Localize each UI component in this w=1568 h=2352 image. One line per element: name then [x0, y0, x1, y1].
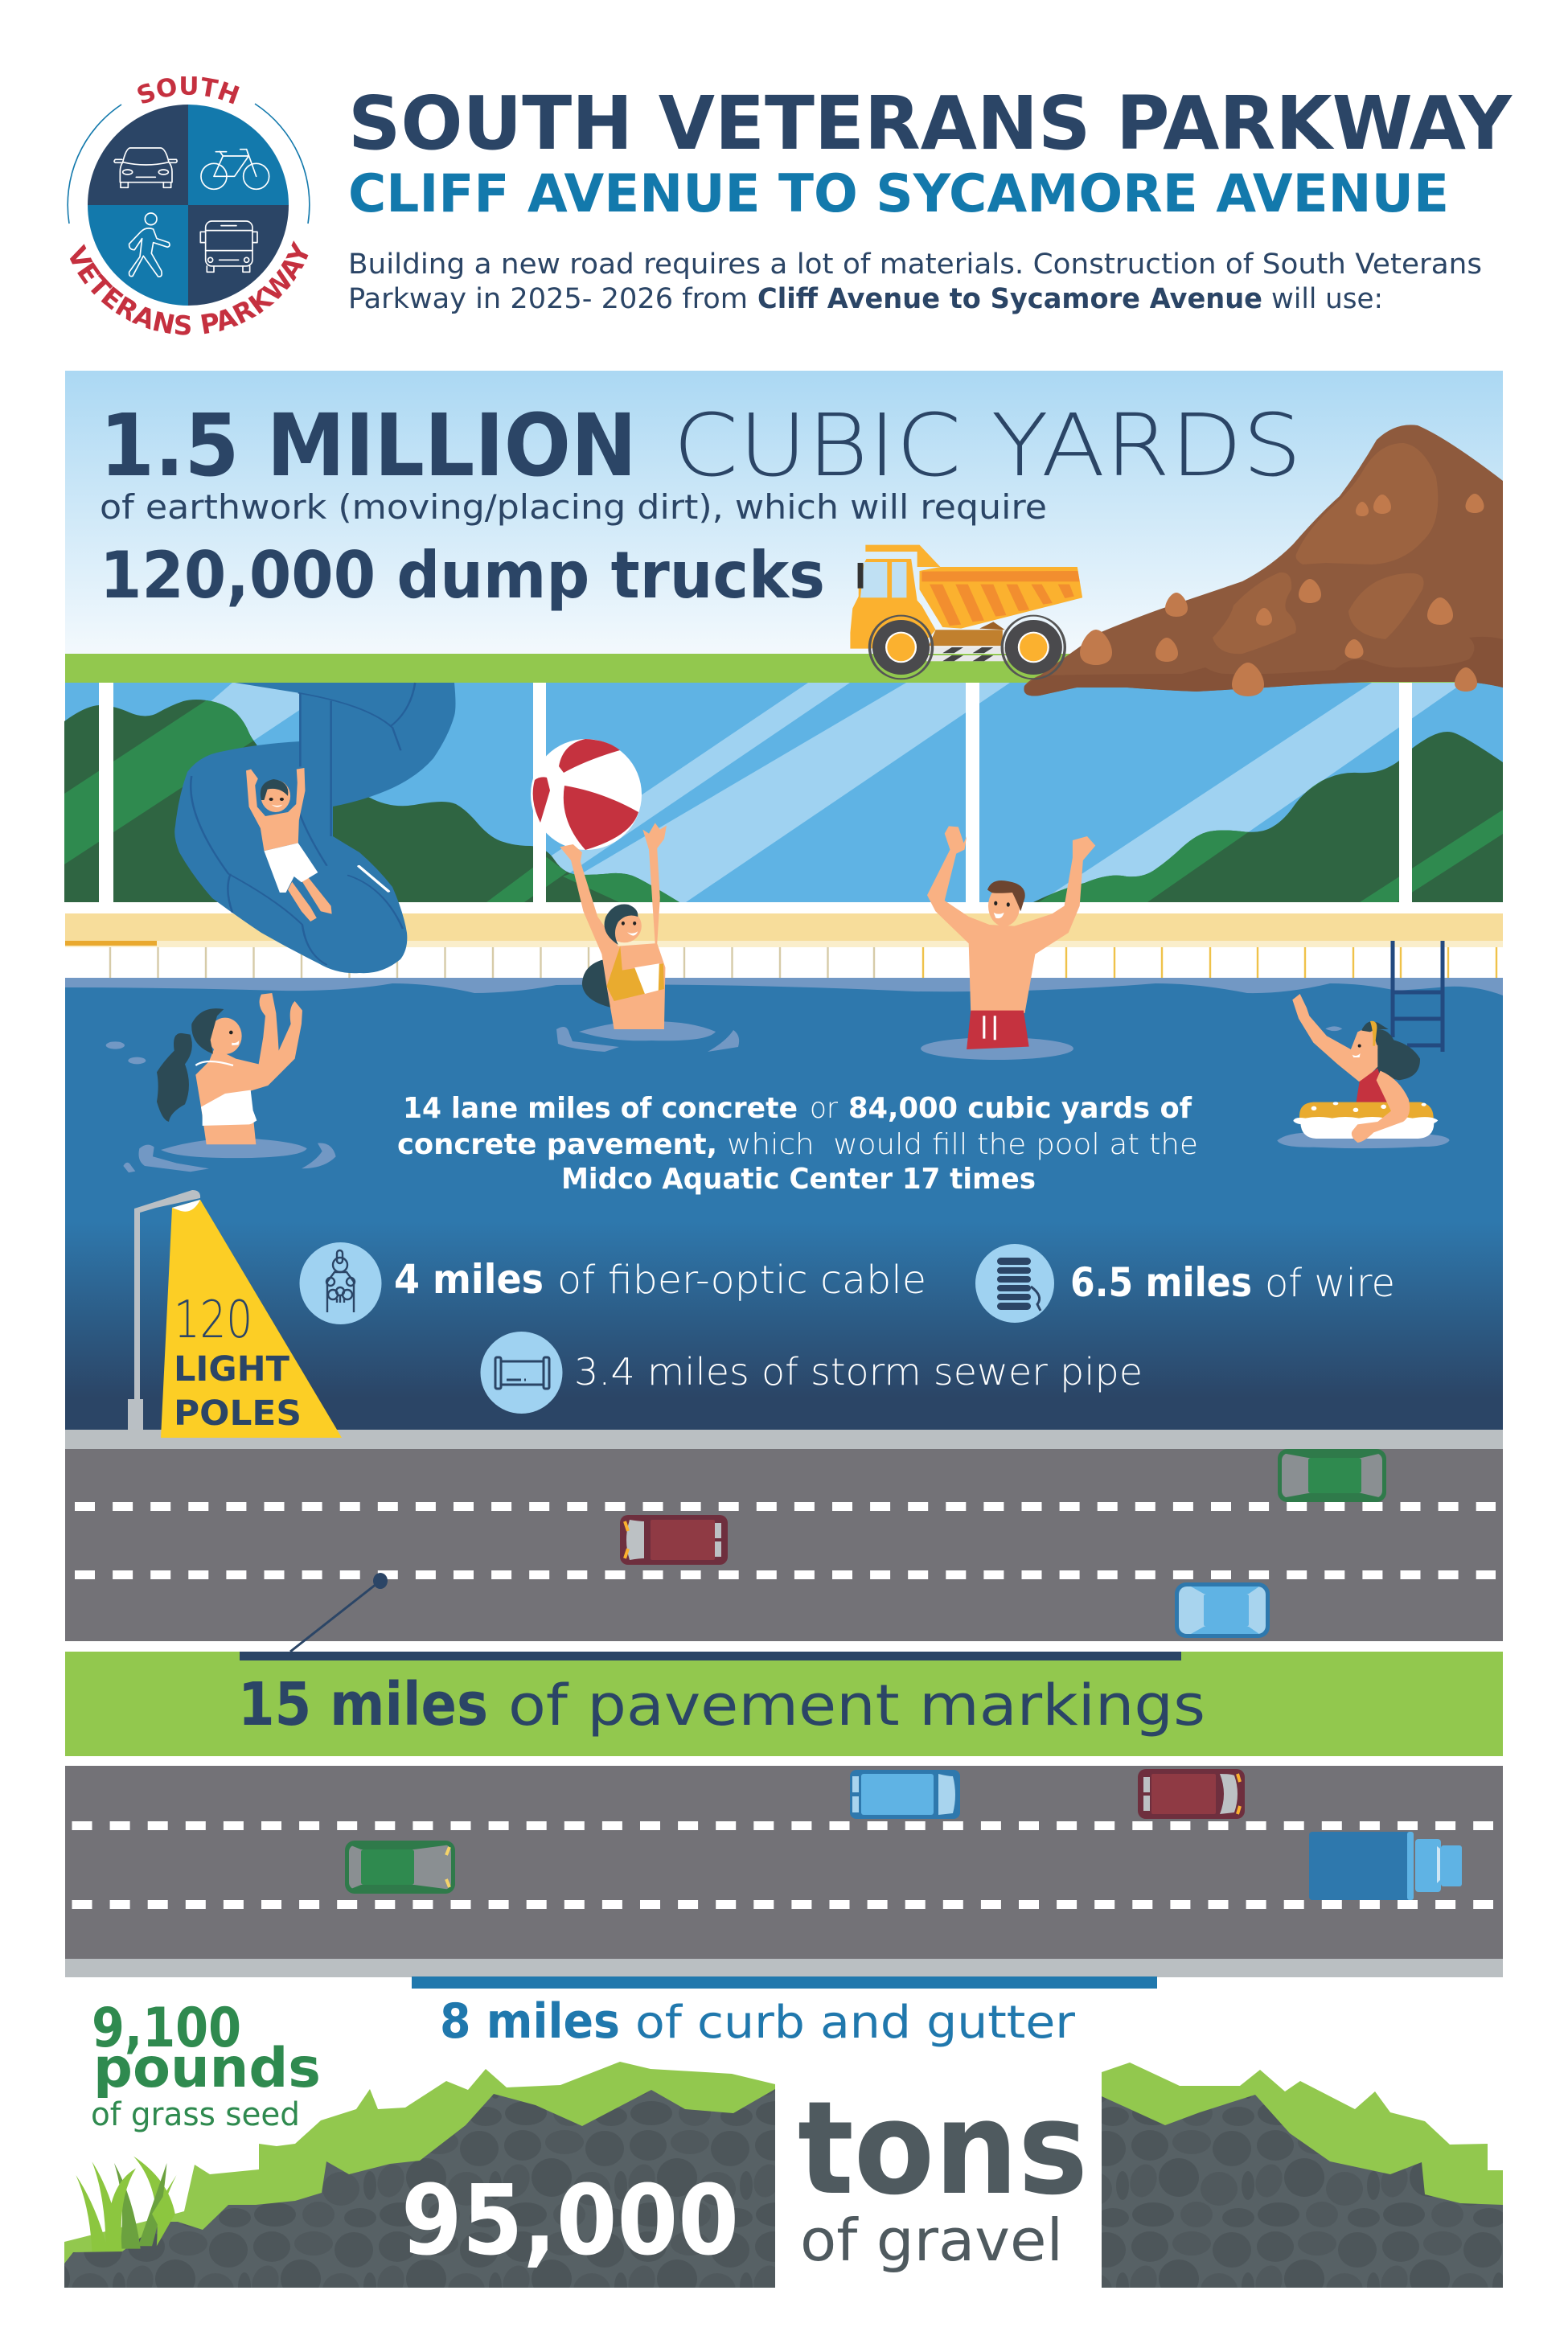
truck dump bed [865, 545, 1082, 630]
van: blue [850, 1770, 960, 1819]
intro paragraph: will use: [1271, 283, 1383, 315]
title: SOUTH VETERANS PARKWAY [348, 80, 1513, 166]
window sky [65, 683, 1503, 902]
stat: 95,000: 95,000 [401, 2165, 739, 2277]
ripple: man [921, 1037, 1073, 1060]
terrain right: grass layer [1102, 2063, 1503, 2288]
icon: fiber-optic cable [299, 1242, 381, 1324]
stat: tons: tons [798, 2073, 1088, 2223]
dirt mound with rocks [1024, 425, 1503, 696]
intro paragraph: Building a new road requires a lot of materials. Construction of South Veterans [348, 248, 1482, 281]
water surface wave [65, 978, 1503, 995]
street light with beam [128, 1190, 342, 1438]
logo text: SOUTH: SOUTH [138, 76, 240, 105]
lamp lens [172, 1200, 200, 1212]
panel: pool water [65, 978, 1503, 1430]
car: light blue [1175, 1582, 1270, 1638]
intro paragraph: Parkway in 2025- 2026 from [348, 283, 748, 315]
pool deck [65, 913, 1503, 941]
text: grass seed: 9,100 [92, 1997, 241, 2060]
truck chassis [929, 630, 1003, 646]
person: man in red shorts [921, 826, 1095, 1060]
car: red [620, 1515, 728, 1565]
man figure [927, 826, 1095, 1049]
panel: median [65, 1652, 1503, 1756]
lane dashes [75, 1507, 1496, 1574]
text: grass seed [91, 1997, 321, 2133]
truck cab [850, 559, 936, 649]
dump truck [850, 545, 1082, 679]
text: grass seed: of grass seed [91, 2096, 300, 2133]
text: 120 light poles: POLES [174, 1394, 302, 1434]
panel: road upper [65, 1449, 1503, 1641]
water slide [174, 683, 455, 973]
text: 15 miles of pavement markings: 15 miles [238, 1670, 488, 1739]
concrete callout: 84,000 cubic yards of [848, 1092, 1192, 1125]
text: fiber-optic cable: of fiber-optic cable [557, 1258, 926, 1303]
slide seam lines [191, 683, 415, 965]
terrain left: grass layer [64, 2062, 775, 2288]
light pole [128, 1190, 200, 1430]
logo outer arcs [68, 104, 310, 224]
marking bar [240, 1652, 1181, 1660]
mound light patches [1213, 443, 1438, 654]
road curb top [65, 1430, 1503, 1449]
text: grass seed: pounds [93, 2037, 321, 2100]
text: fiber-optic cable: 4 miles [394, 1256, 544, 1303]
truck chassis bars [926, 647, 1008, 661]
pavement marking pointer [290, 1573, 388, 1652]
ripple: woman with ball [556, 1021, 739, 1052]
text: 8 miles of curb and gutter [440, 1993, 1076, 2050]
truck cab windows [860, 562, 906, 597]
text: 120 light poles [174, 1291, 302, 1434]
person: woman with ponytail [106, 993, 336, 1172]
intro paragraph: Cliff Avenue to Sycamore Avenue [757, 283, 1262, 315]
hill light bands [64, 683, 1503, 902]
logo: South Veterans Parkway roundel [67, 76, 310, 335]
concrete callout: which would fill the pool at the [727, 1128, 1198, 1161]
window light bands [185, 683, 1463, 902]
text: 8 miles of curb and gutter: 8 miles [440, 1993, 620, 2050]
logo icons: car, bicycle, pedestrian, bus [114, 148, 269, 277]
text: wire [1070, 1259, 1395, 1306]
text: 120 light poles: 120 [174, 1291, 252, 1350]
text: of gravel: of gravel [800, 2206, 1063, 2274]
window pillars [99, 683, 1412, 902]
light beam [161, 1200, 342, 1438]
person: woman in float ring [1277, 994, 1450, 1148]
person: boy on slide [246, 768, 332, 922]
grass strip [65, 654, 1503, 683]
text: storm sewer pipe: 3.4 miles of storm sewer pipe [574, 1350, 1143, 1394]
truck wheels [870, 616, 1065, 679]
truck: blue, top view [1309, 1832, 1462, 1900]
rocks [1080, 494, 1484, 696]
text: 15 miles of pavement markings: of pavement markings [508, 1673, 1205, 1738]
stat: dump trucks: 120,000 dump trucks [100, 538, 825, 613]
icon: storm sewer pipe [481, 1332, 563, 1414]
panel: earthwork sky [65, 371, 1503, 654]
text: 8 miles of curb and gutter: of curb and gutter [635, 1997, 1076, 2049]
car: red [1138, 1769, 1245, 1819]
concrete callout: 14 lane miles of concrete [403, 1092, 798, 1125]
text: fiber-optic cable [394, 1256, 926, 1303]
pool ladder [1393, 941, 1443, 1052]
grass tuft [76, 2157, 176, 2251]
text: 15 miles of pavement markings [238, 1670, 1205, 1739]
earthwork description: of earthwork (moving/placing dirt), which will require [100, 487, 1047, 527]
window ledge [65, 902, 1503, 913]
intro paragraph [348, 248, 1482, 315]
lane dashes [72, 1825, 1493, 1904]
logo text: VETERANS PARKWAY: VETERANS PARKWAY [69, 240, 309, 335]
heading: 1.5 million: 1.5 MILLION [100, 396, 637, 496]
concrete callout [397, 1092, 1198, 1196]
terrain left: gravel layer [64, 2089, 775, 2288]
car: green [1278, 1449, 1386, 1502]
deck edge [65, 941, 1503, 947]
concrete callout: Midco Aquatic Center 17 times [561, 1163, 1036, 1196]
panel: pool window scene [64, 683, 1503, 978]
hills [64, 700, 1503, 902]
concrete callout: concrete pavement, [397, 1128, 717, 1161]
deck accent [65, 941, 157, 946]
curb and gutter bar [412, 1976, 1157, 1989]
panel: road lower [65, 1766, 1503, 1959]
pool tiles [65, 947, 1503, 978]
text: 120 light poles: LIGHT [174, 1349, 290, 1389]
subtitle: CLIFF AVENUE TO SYCAMORE AVENUE [348, 164, 1449, 224]
logo quadrant disc [88, 105, 289, 306]
car: green [345, 1841, 455, 1894]
concrete callout: or [810, 1092, 838, 1125]
text: wire: of wire [1265, 1261, 1395, 1306]
beach ball [531, 739, 642, 850]
road curb bottom [65, 1959, 1503, 1977]
mound dark base [1024, 637, 1503, 696]
truck mirror [858, 563, 863, 589]
text: wire: 6.5 miles [1070, 1259, 1252, 1306]
person: woman with ball [560, 823, 667, 1029]
terrain right: gravel layer [1102, 2095, 1503, 2288]
heading: cubic yards: CUBIC YARDS [673, 396, 1302, 496]
icon: wire coil [975, 1244, 1054, 1323]
